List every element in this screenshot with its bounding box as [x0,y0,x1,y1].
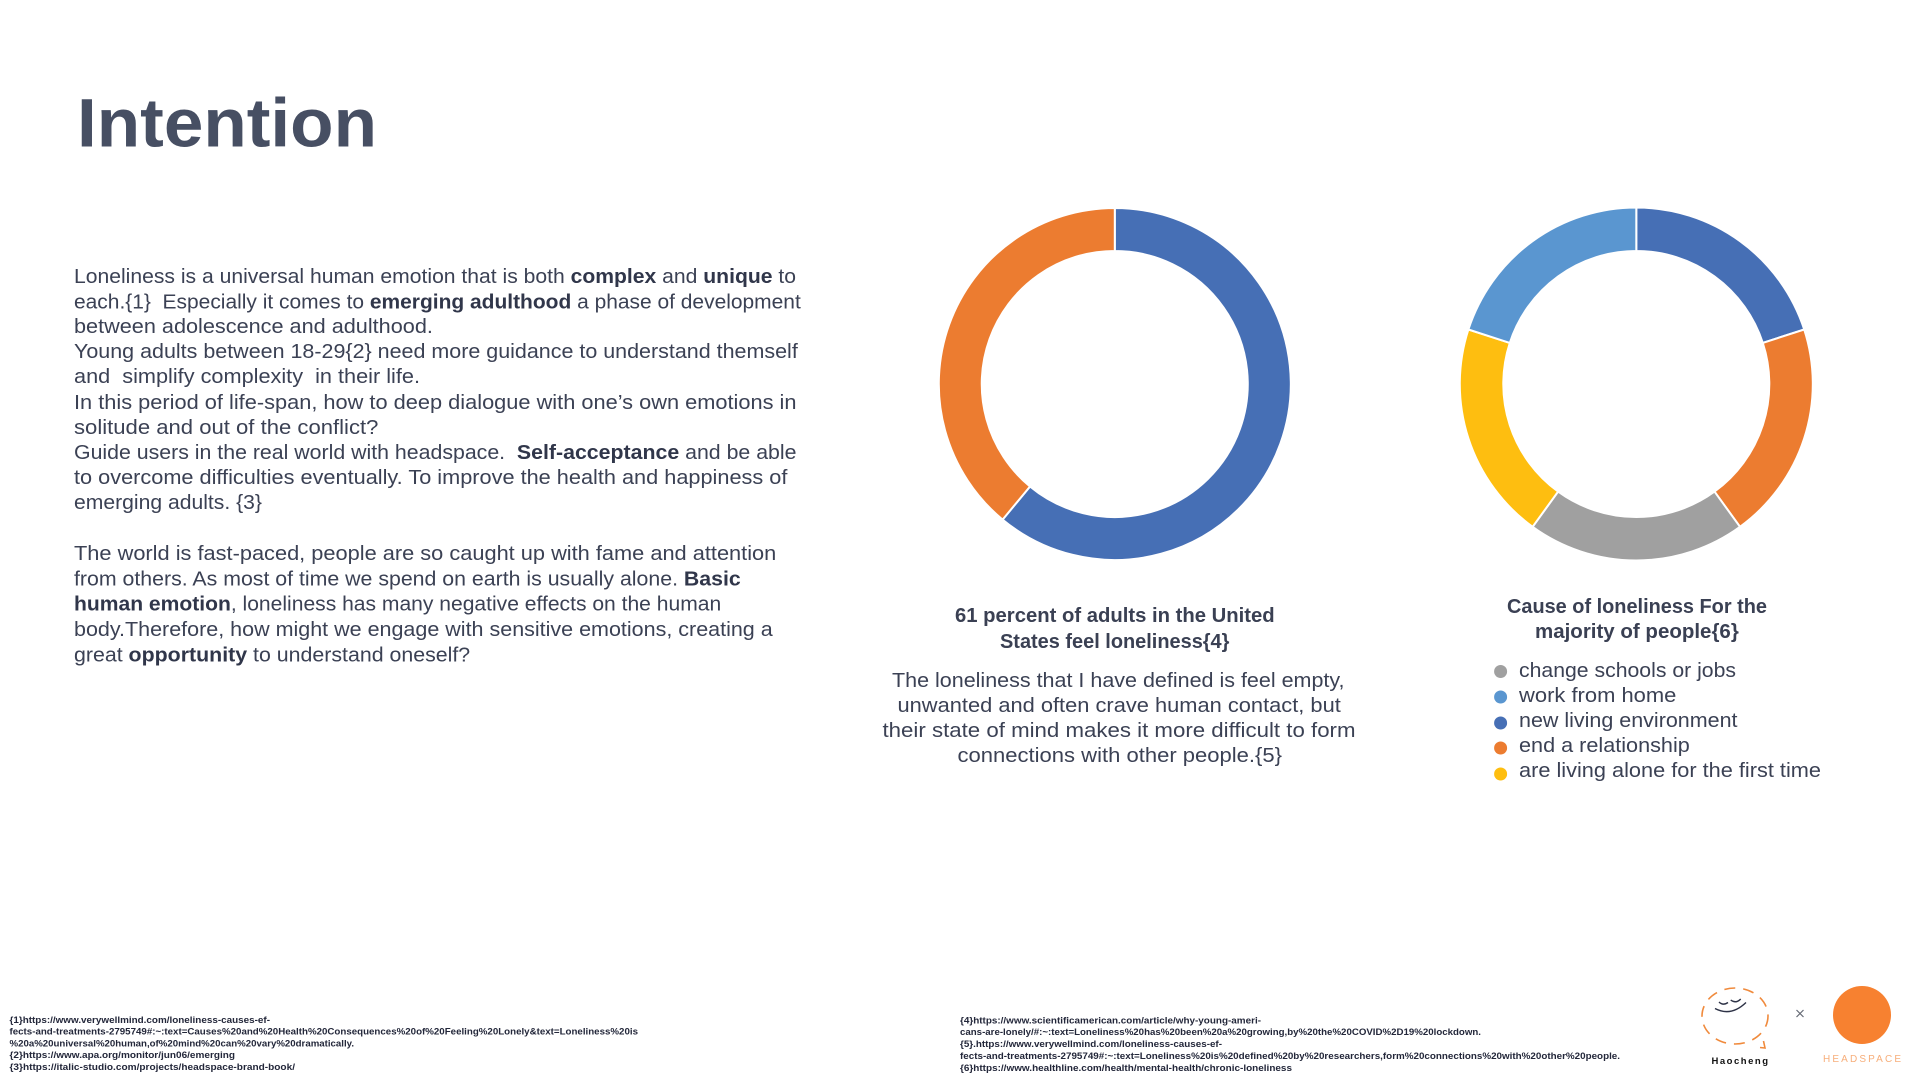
footnotes: left references [10,1015,638,1072]
legend item: change schools or jobs: change schools or jobs [1519,659,1736,682]
title: Intention [77,84,377,162]
footnotes: left references: %20a%20universal%20human,of%20mind%20can%20vary%20dramatically. [10,1038,354,1048]
segment: 39 percent orange [939,208,1115,520]
footnotes: left references: {1}https://www.verywellmind.com/loneliness-causes-ef- [10,1015,270,1025]
icon: times symbol [1796,1010,1804,1017]
heading: 61 percent of adults: 61 percent of adults in the United [955,605,1275,627]
legend [1494,659,1821,782]
footnotes: left references: {3}https://italic-studio.com/projects/headspace-brand-book/ [10,1062,296,1072]
segment: end a relationship [1714,330,1813,527]
heading: cause of loneliness: Cause of loneliness For the [1507,596,1767,618]
footnotes: left references: {2}https://www.apa.org/monitor/jun06/emerging [10,1050,235,1060]
segment: 61 percent blue [1003,208,1291,560]
footnotes: right references: {6}https://www.healthline.com/health/mental-health/chronic-loneliness [960,1063,1292,1073]
legend item: work from home: work from home [1518,684,1676,707]
text block: loneliness definition: their state of mind makes it more difficult to form [882,719,1356,742]
text block: loneliness definition: connections with other people.{5} [958,744,1282,767]
text block: intro paragraph: and simplify complexity in their life. [74,365,420,388]
footnotes: right references [960,1016,1620,1073]
segment: work from home [1468,207,1636,343]
text block: intro paragraph: Loneliness is a universal human emotion that is both complex and unique to [74,265,796,288]
text block: intro paragraph: between adolescence and adulthood. [74,315,433,338]
text block: loneliness definition: unwanted and often crave human contact, but [898,694,1341,717]
text block: intro paragraph: emerging adults. {3} [74,491,262,514]
footnotes: right references: {5}.https://www.verywellmind.com/loneliness-causes-ef- [960,1039,1222,1049]
text block: intro paragraph: Guide users in the real world with headspace. Self-acceptance and be able [74,441,796,464]
footnotes: right references: fects-and-treatments-2795749#:~:text=Loneliness%20is%20defined%20by%20researchers,form%20connections%20with%20other%20people. [960,1051,1620,1061]
text block: second paragraph: from others. As most of time we spend on earth is usually alone. Basic [74,568,741,590]
heading: 61 percent of adults [955,605,1275,653]
logo: Haocheng speech bubble: Haocheng [1712,1056,1768,1067]
legend item: new living environment: new living environment [1519,709,1738,732]
donut chart: 61 percent feel loneliness [939,208,1291,560]
text block: loneliness definition [882,669,1356,767]
text block: intro paragraph: to overcome difficulties eventually. To improve the health and happiness of [74,466,788,489]
text block: intro paragraph: each.{1} Especially it comes to emerging adulthood a phase of development [74,290,801,314]
footnotes: right references: cans-are-lonely/#:~:text=Loneliness%20has%20been%20a%20growing,by%20the%20COVID%2D19%20lockdown. [960,1027,1481,1037]
text block: intro paragraph: Young adults between 18-29{2} need more guidance to understand themself [74,340,798,363]
segment: new living environment [1636,208,1804,343]
text block: loneliness definition: The loneliness that I have defined is feel empty, [892,669,1344,692]
text block: second paragraph [74,542,776,666]
footnotes: right references: {4}https://www.scientificamerican.com/article/why-young-ameri- [960,1016,1261,1026]
text block: second paragraph: great opportunity to understand oneself? [74,644,470,666]
text block: second paragraph: body.Therefore, how might we engage with sensitive emotions, creating a [74,618,773,641]
legend item: are living alone: are living alone for the first time [1519,759,1821,782]
text block: intro paragraph: In this period of life-span, how to deep dialogue with one’s own emotions in [74,391,797,414]
heading: 61 percent of adults: States feel loneliness{4} [1000,631,1230,653]
logo: Haocheng speech bubble [1702,988,1768,1067]
heading: cause of loneliness: majority of people{6} [1535,621,1739,643]
text block: intro paragraph: solitude and out of the conflict? [74,416,378,439]
text block: second paragraph: human emotion, loneliness has many negative effects on the human [74,592,721,616]
donut chart: causes of loneliness [1460,207,1813,560]
segment: change schools or jobs [1533,492,1740,560]
heading: cause of loneliness [1507,596,1767,643]
text block: second paragraph: The world is fast-paced, people are so caught up with fame and attention [74,542,776,565]
logo: Headspace: HEADSPACE [1823,1054,1901,1065]
text block: intro paragraph [74,265,801,514]
legend item: end a relationship: end a relationship [1519,734,1690,757]
logo: Headspace [1823,986,1901,1065]
footnotes: left references: fects-and-treatments-2795749#:~:text=Causes%20and%20Health%20Consequences%20of%20Feeling%20Lonely&text=Loneliness%20is [10,1026,638,1036]
segment: living alone [1460,330,1558,527]
